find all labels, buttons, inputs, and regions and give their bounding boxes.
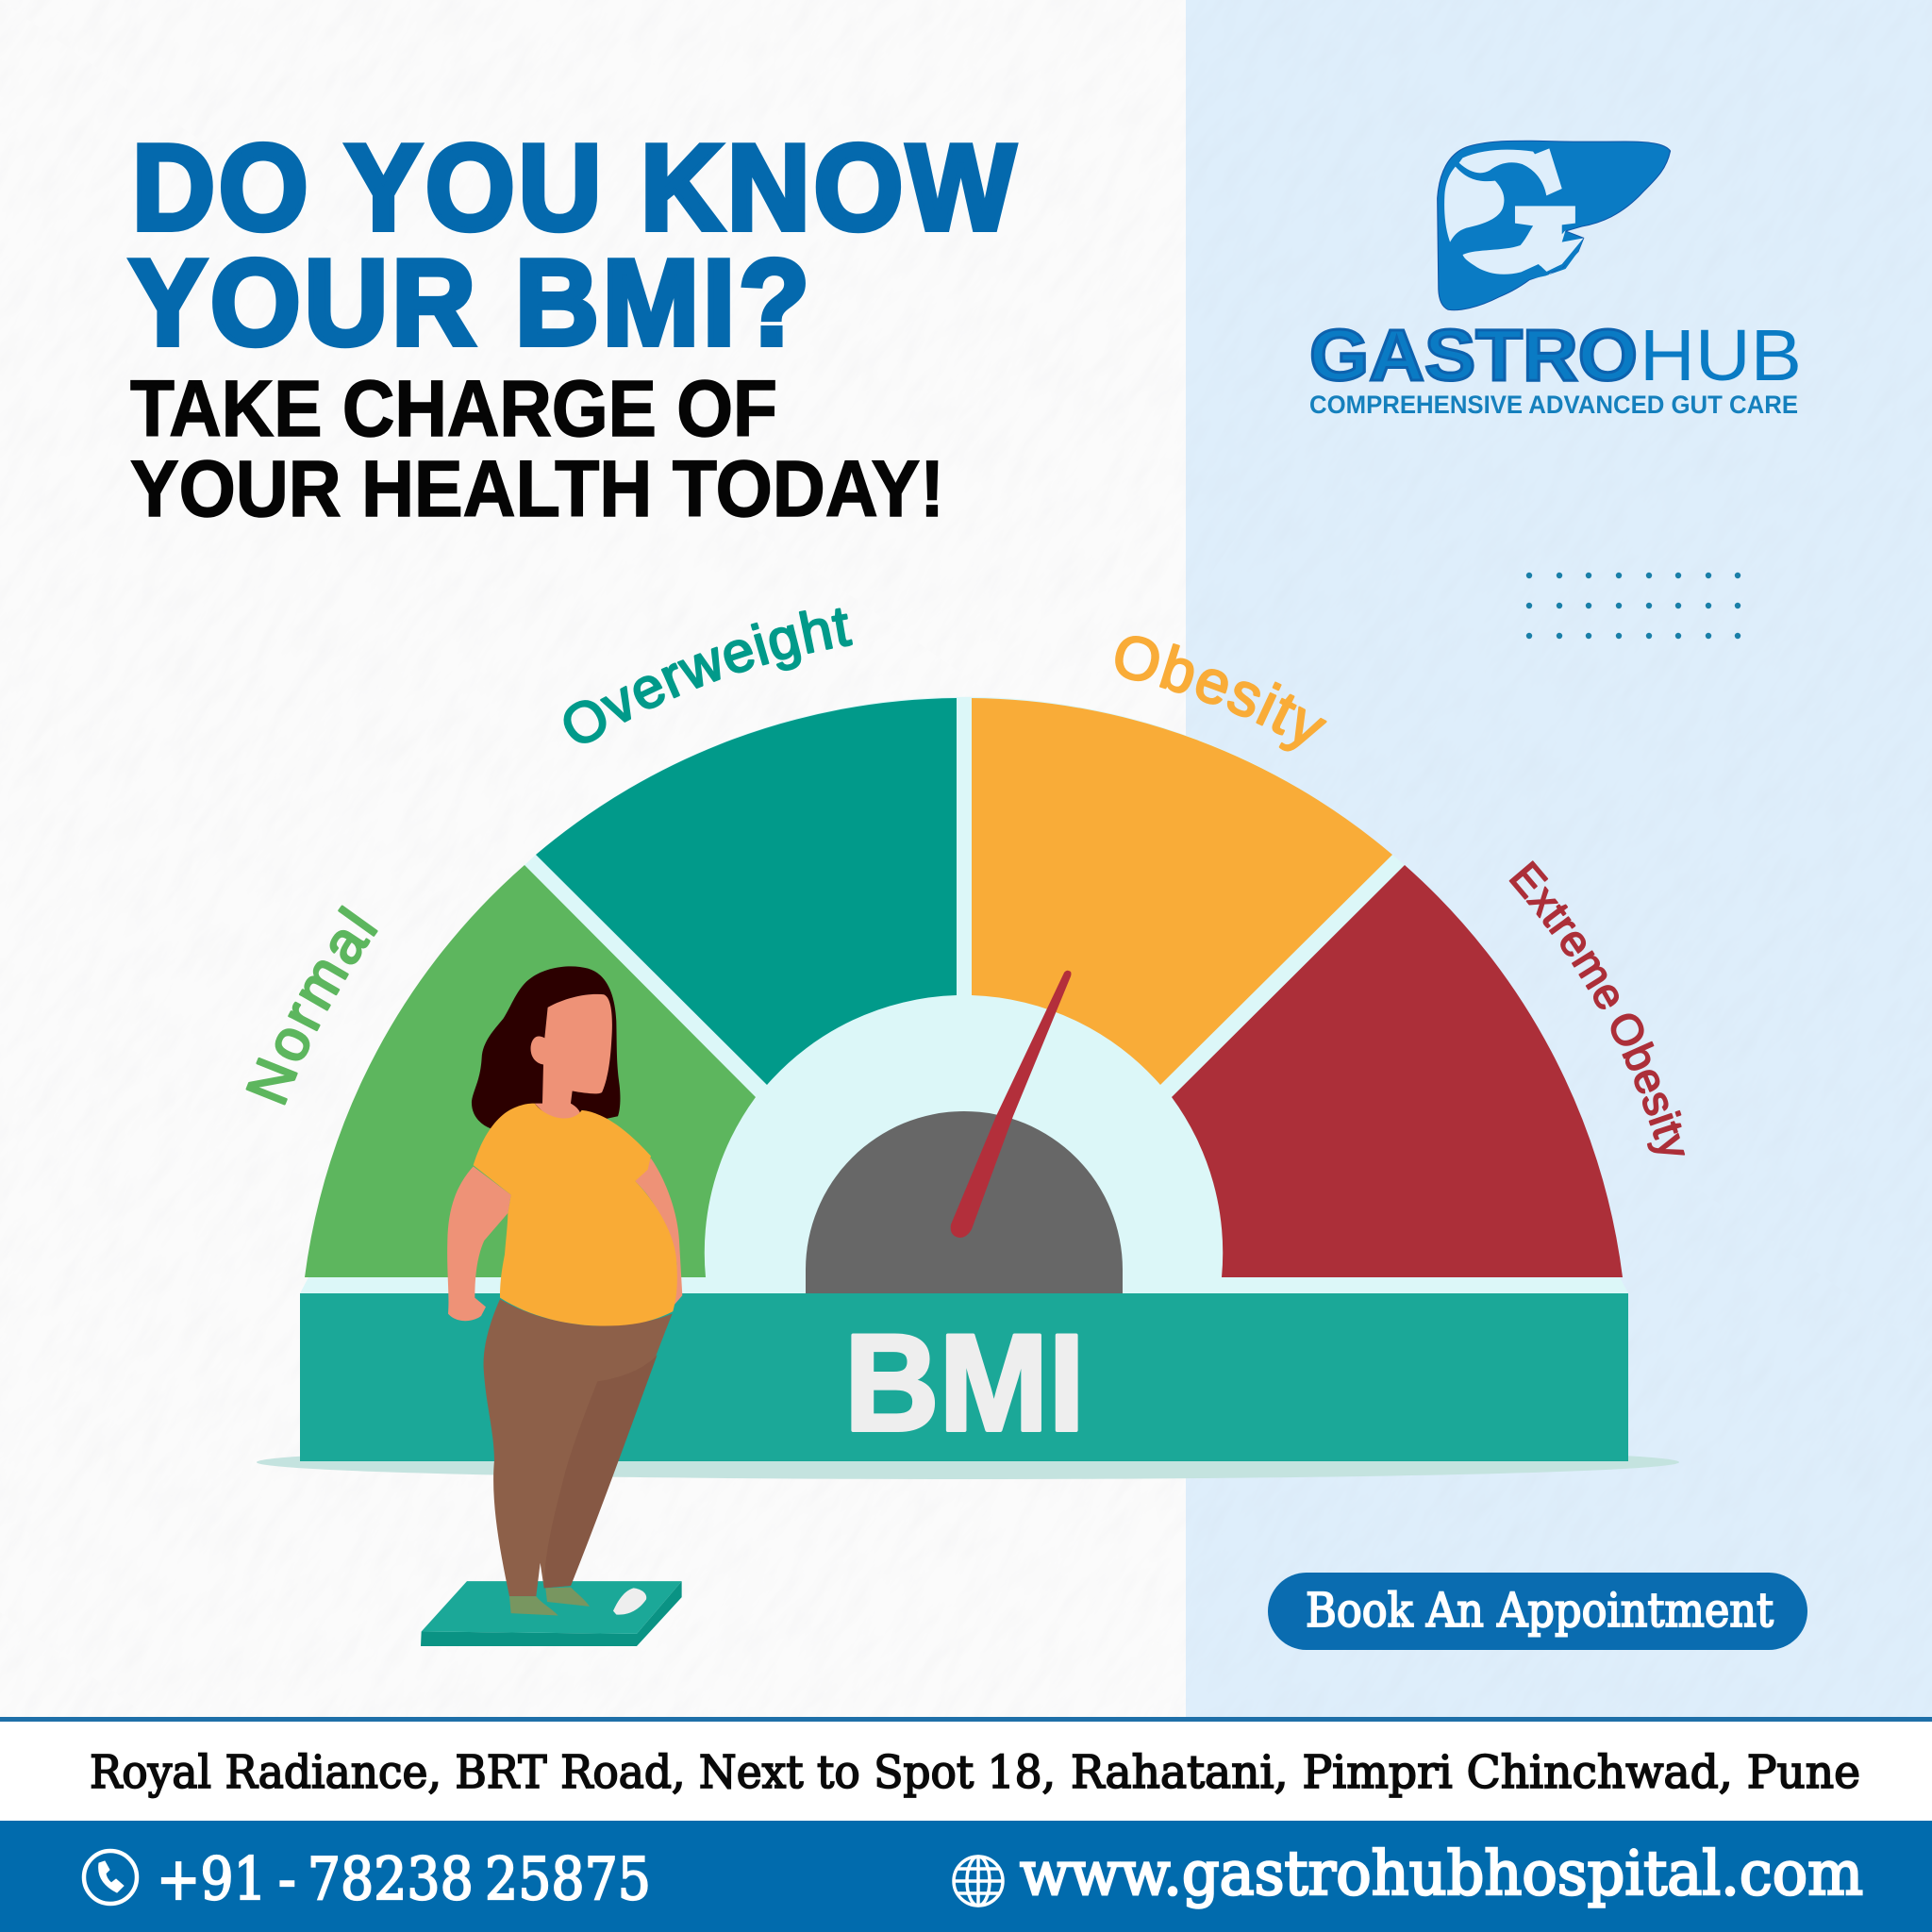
- website: www.gastrohubhospital.com: [1020, 1839, 1863, 1909]
- illustration: woman on scale: [421, 966, 682, 1646]
- bar: BMI: [300, 1293, 1628, 1461]
- scale side: [421, 1581, 682, 1646]
- subheading: take charge: YOUR HEALTH TODAY!: [130, 444, 944, 533]
- contact bar: [0, 1821, 1932, 1932]
- subheading: take charge: TAKE CHARGE OF: [130, 364, 777, 453]
- gauge chart: [245, 608, 1685, 1479]
- segment: normal: [305, 865, 756, 1277]
- address strip: [0, 1717, 1932, 1821]
- label: extreme obesity: Extreme Obesity: [1509, 860, 1685, 1156]
- BMI label: BMI: [844, 1306, 1085, 1459]
- segment: extreme obesity: [1172, 865, 1623, 1277]
- icon: liver: [1438, 141, 1671, 310]
- icon: globe: [954, 1857, 1003, 1906]
- shoes: [509, 1587, 590, 1616]
- label: obesity: Obesity: [1115, 636, 1327, 751]
- subheading: take charge: [130, 364, 944, 533]
- trouser shade: [544, 1355, 658, 1588]
- segment: obesity: [972, 698, 1392, 1085]
- brand name: [1309, 315, 1802, 396]
- phone number: +91 - 78238 25875: [157, 1844, 651, 1913]
- tagline: COMPREHENSIVE ADVANCED GUT CARE: [1309, 391, 1798, 419]
- heading: do you know your BMI: YOUR BMI?: [129, 235, 813, 371]
- gauge base: [300, 697, 1628, 1293]
- face and neck: [531, 994, 612, 1124]
- scale dial: [613, 1588, 646, 1615]
- decorative dot grid: [1526, 573, 1740, 639]
- gauge hub: [806, 1111, 1123, 1293]
- logo: Gastrohub: [1309, 141, 1802, 419]
- shirt: [474, 1104, 677, 1326]
- address strip: Rahatani, Pimpri Chinchwad, Pune: [1071, 1746, 1860, 1799]
- button: book an appointment: [1268, 1573, 1807, 1650]
- far arm: [635, 1158, 682, 1305]
- label: overweight: Overweight: [564, 608, 853, 743]
- ground shadow: [257, 1445, 1679, 1479]
- icon: phone: [84, 1851, 137, 1904]
- hair: [472, 966, 620, 1128]
- trousers: [484, 1299, 673, 1596]
- near arm: [447, 1167, 511, 1321]
- label: normal: Normal: [245, 906, 378, 1106]
- address strip: Royal Radiance, BRT Road, Next to Spot 18,: [90, 1746, 1056, 1799]
- scale top: [422, 1581, 682, 1634]
- heading: do you know your BMI: DO YOU KNOW: [132, 120, 1019, 256]
- button: book an appointment: Book An Appointment: [1306, 1583, 1774, 1638]
- heading: do you know your BMI: [129, 120, 1019, 371]
- brand name: GASTRO: [1309, 315, 1638, 396]
- brand name: HUB: [1640, 315, 1802, 396]
- background: light blue right panel: [1186, 0, 1932, 1717]
- needle: [951, 971, 1072, 1238]
- segment: overweight: [536, 698, 957, 1085]
